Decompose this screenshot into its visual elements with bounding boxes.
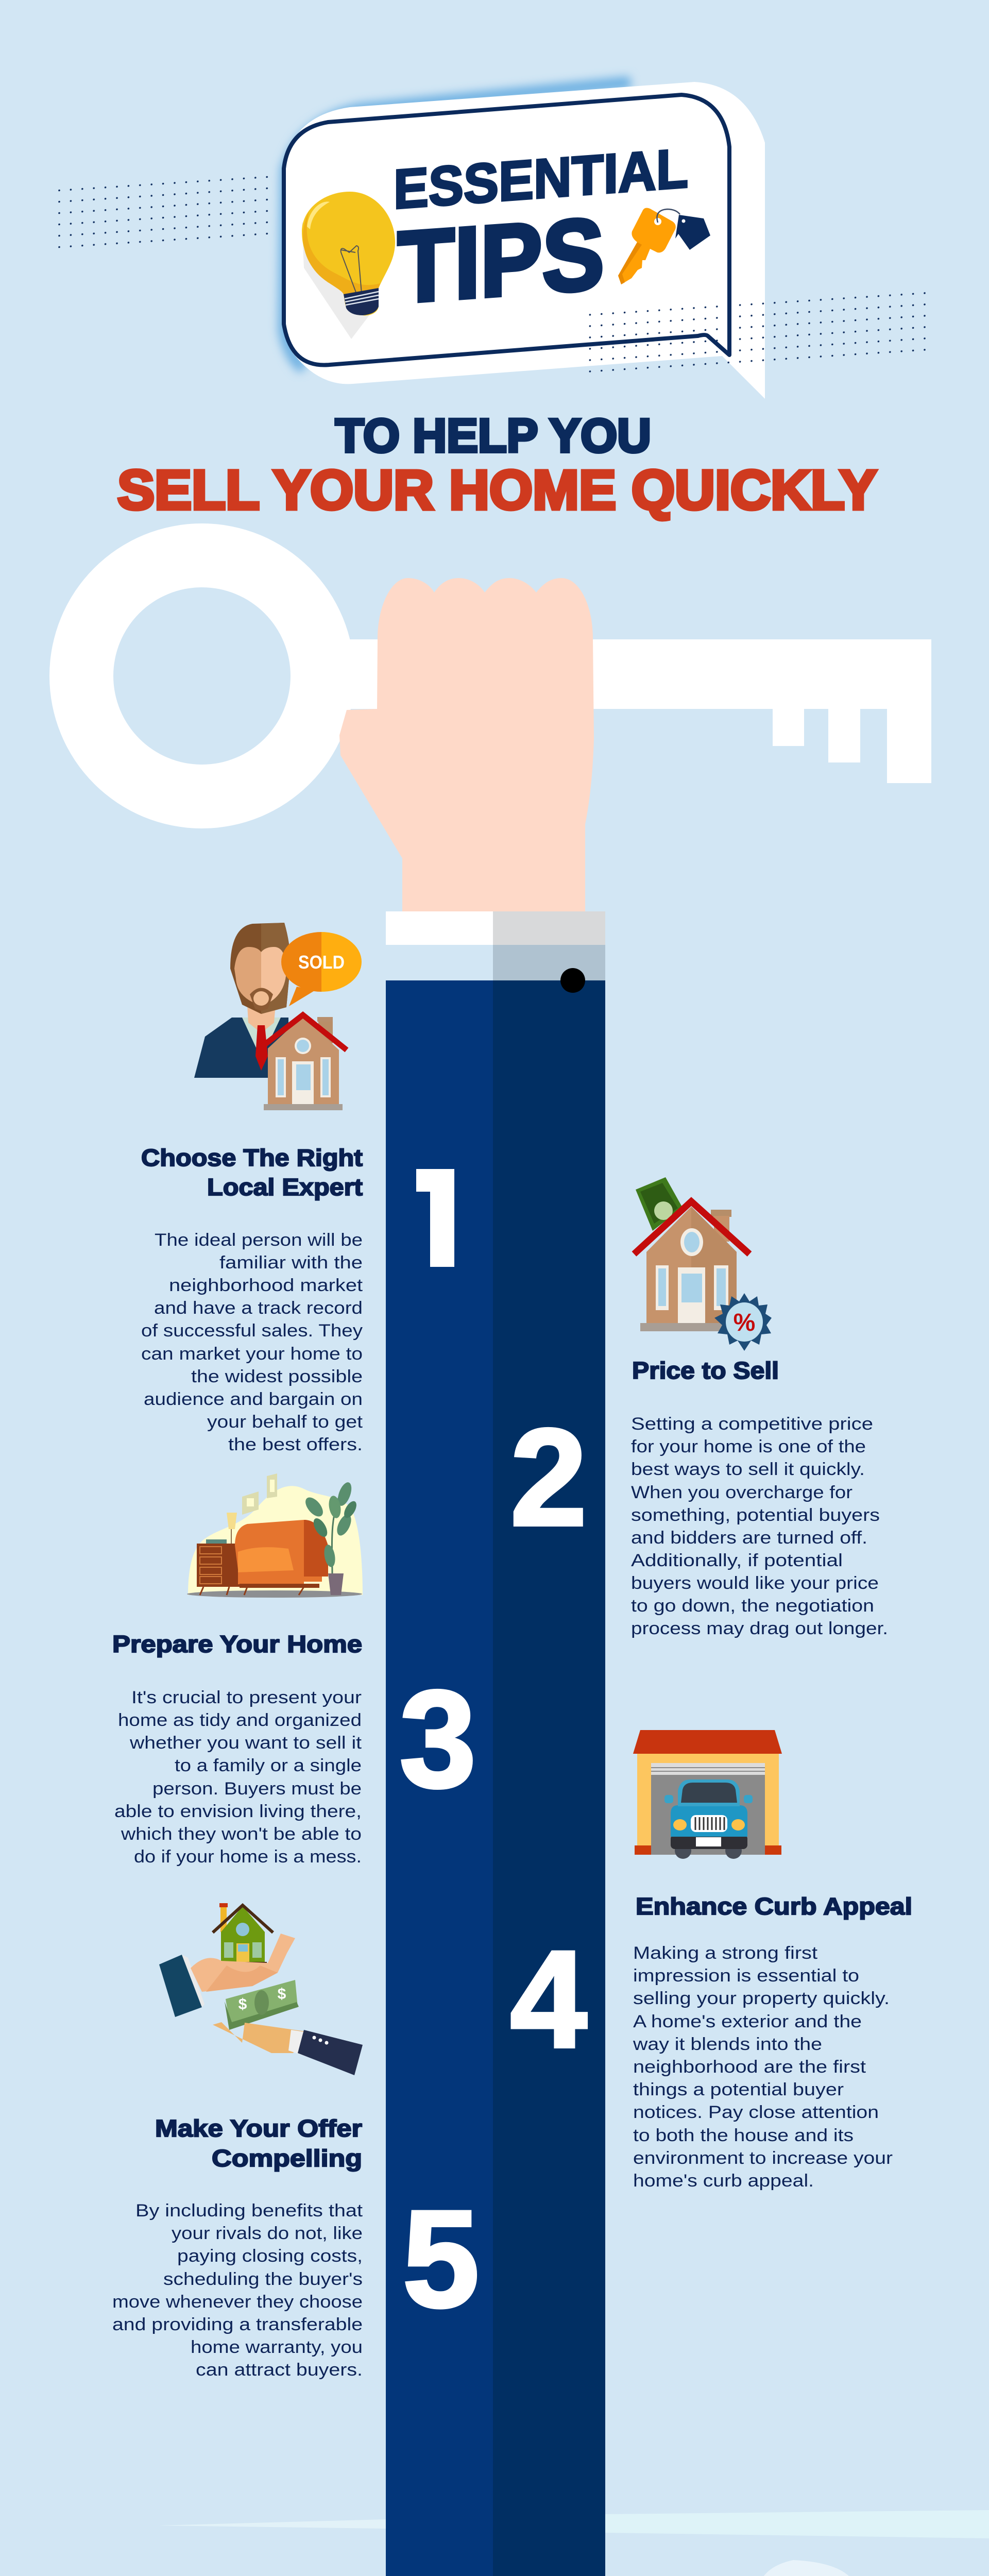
icon: orange key with tag xyxy=(618,208,710,284)
step 4: enhance curb appeal xyxy=(633,1893,912,2191)
body text 3 xyxy=(114,1688,362,1867)
number 5: 5 xyxy=(402,2181,480,2336)
body text 3: do if your home is a mess. xyxy=(134,1847,362,1867)
sky bands and clouds right xyxy=(605,2510,989,2576)
body text 4: home's curb appeal. xyxy=(633,2171,814,2191)
body text 1: The ideal person will be xyxy=(155,1230,363,1250)
body text 4: to both the house and its xyxy=(633,2126,854,2145)
body text 3: able to envision living there, xyxy=(114,1802,362,1821)
body text 3: which they won't be able to xyxy=(121,1824,362,1844)
number 2: 2 xyxy=(510,1400,587,1554)
body text 2: When you overcharge for xyxy=(631,1483,852,1502)
body text 4: Making a strong first xyxy=(633,1943,818,1963)
body text 4: things a potential buyer xyxy=(633,2080,844,2099)
body text 1: your behalf to get xyxy=(207,1412,363,1432)
heading 1: Local Expert xyxy=(207,1174,363,1200)
heading 5: Make Your Offer xyxy=(155,2115,362,2142)
heading 4: Enhance Curb Appeal xyxy=(636,1893,912,1920)
body text 3: home as tidy and organized xyxy=(118,1710,362,1730)
title: ESSENTIAL: ESSENTIAL xyxy=(394,137,688,221)
body text 2 xyxy=(631,1414,888,1638)
body text 4: neighborhood are the first xyxy=(633,2057,866,2077)
heading 2: Price to Sell xyxy=(632,1357,779,1384)
body text 5: home warranty, you xyxy=(191,2337,363,2357)
body text 5 xyxy=(112,2201,363,2380)
heading 3: Prepare Your Home xyxy=(112,1631,362,1657)
cuff button xyxy=(560,968,585,993)
body text 5: can attract buyers. xyxy=(196,2360,363,2380)
body text 1 xyxy=(141,1230,363,1454)
body text 2: process may drag out longer. xyxy=(631,1619,888,1638)
sold label: SOLD xyxy=(298,952,345,973)
body text 5: your rivals do not, like xyxy=(172,2224,363,2243)
giant white key xyxy=(49,523,931,828)
icon: living room with sofa and plant xyxy=(187,1473,363,1598)
dollar label right: $ xyxy=(278,1986,286,2003)
title: TIPS: TIPS xyxy=(398,196,604,324)
body text 1: neighborhood market xyxy=(169,1276,363,1295)
body text 5: By including benefits that xyxy=(135,2201,363,2221)
body text 5: and providing a transferable xyxy=(112,2315,363,2334)
body text 5: move whenever they choose xyxy=(112,2292,363,2312)
body text 4: environment to increase your xyxy=(633,2148,893,2168)
number 1 xyxy=(416,1169,454,1267)
icon: real estate agent with sold bubble and house xyxy=(194,923,362,1110)
body text 1: audience and bargain on xyxy=(144,1389,363,1409)
body text 3: It's crucial to present your xyxy=(131,1688,362,1707)
body text 1: can market your home to xyxy=(141,1344,363,1364)
step 5: make your offer compelling xyxy=(112,2115,363,2380)
body text 3: whether you want to sell it xyxy=(129,1733,362,1753)
step 2: price to sell xyxy=(631,1357,888,1638)
body text 2: best ways to sell it quickly. xyxy=(631,1460,865,1479)
icon: garage with blue truck xyxy=(633,1730,782,1859)
heading 1 xyxy=(141,1144,363,1200)
body text 4: A home's exterior and the xyxy=(633,2012,862,2031)
body text 2: something, potential buyers xyxy=(631,1505,880,1525)
heading: to help you: TO HELP YOU xyxy=(335,410,651,462)
body text 4 xyxy=(633,1943,893,2191)
heading 5: Compelling xyxy=(212,2145,362,2172)
body text 2: buyers would like your price xyxy=(631,1573,879,1593)
heading 1: Choose The Right xyxy=(141,1144,363,1171)
heading 5 xyxy=(155,2115,362,2172)
step 1: choose the right local expert xyxy=(141,1144,363,1454)
dot grid: left xyxy=(55,166,276,251)
percent label: % xyxy=(734,1309,755,1336)
body text 1: the widest possible xyxy=(191,1367,363,1386)
step 3: prepare your home xyxy=(112,1631,362,1867)
icon: hands exchanging house and money xyxy=(159,1903,363,2075)
body text 4: impression is essential to xyxy=(633,1966,859,1986)
dot grid: right xyxy=(583,288,931,381)
body text 2: to go down, the negotiation xyxy=(631,1596,874,1616)
number 1: 1 xyxy=(400,1142,478,1296)
body text 1: familiar with the xyxy=(219,1253,363,1273)
body text 4: notices. Pay close attention xyxy=(633,2103,879,2122)
number 3: 3 xyxy=(399,1662,476,1816)
body text 5: scheduling the buyer's xyxy=(163,2269,363,2289)
body text 2: Setting a competitive price xyxy=(631,1414,873,1434)
body text 1: of successful sales. They xyxy=(141,1321,363,1341)
speech bubble with title xyxy=(284,82,765,399)
dollar label left: $ xyxy=(238,1996,247,2013)
body text 5: paying closing costs, xyxy=(177,2246,363,2266)
body text 2: Additionally, if potential xyxy=(631,1551,843,1570)
sleeve arm xyxy=(386,945,605,2576)
body text 4: way it blends into the xyxy=(633,2035,822,2054)
icon: light bulb xyxy=(302,192,395,339)
heading: sell your home quickly: SELL YOUR HOME QUICKLY xyxy=(117,459,877,521)
body text 1: the best offers. xyxy=(228,1435,363,1454)
shirt cuff xyxy=(386,911,605,945)
body text 2: and bidders are turned off. xyxy=(631,1528,867,1548)
sky bands and clouds left xyxy=(0,2519,386,2576)
icon: house with money and discount badge xyxy=(634,1177,772,1351)
body text 2: for your home is one of the xyxy=(631,1437,866,1456)
hand gripping the key xyxy=(339,578,594,911)
body text 1: and have a track record xyxy=(154,1298,363,1318)
body text 3: to a family or a single xyxy=(175,1756,362,1775)
body text 4: selling your property quickly. xyxy=(633,1989,890,2008)
body text 3: person. Buyers must be xyxy=(152,1779,362,1799)
number 4: 4 xyxy=(510,1922,588,2076)
